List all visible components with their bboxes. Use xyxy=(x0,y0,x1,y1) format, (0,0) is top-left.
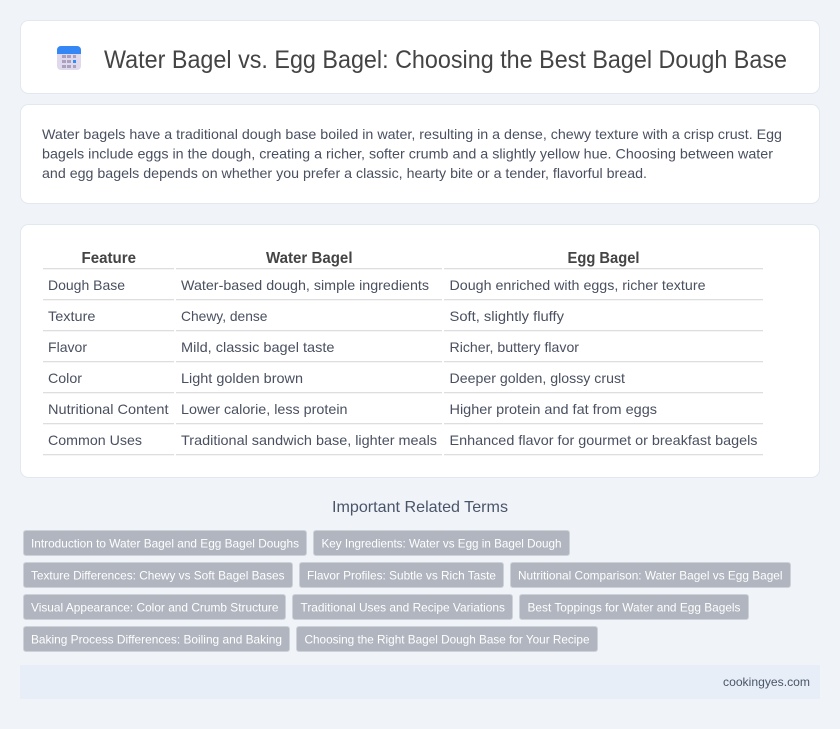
tag: Key Ingredients: Water vs Egg in Bagel Dough xyxy=(322,536,562,550)
row: nutritional content: Nutritional Content xyxy=(48,401,169,417)
tag xyxy=(24,594,286,620)
text block: introduction: and egg bagels depends on whether you prefer a classic, hearty bite or a tender, flavorful bread. xyxy=(42,165,647,181)
table header: Water Bagel xyxy=(266,250,352,267)
tag xyxy=(510,562,790,588)
row: nutritional content: Higher protein and fat from eggs xyxy=(450,401,657,417)
row: common uses xyxy=(48,432,758,448)
tag: Choosing the Right Bagel Dough Base for Your Recipe xyxy=(304,632,590,646)
tag: Flavor Profiles: Subtle vs Rich Taste xyxy=(307,568,496,582)
row: texture: Texture xyxy=(48,308,96,324)
row: texture xyxy=(48,308,564,324)
tag xyxy=(24,626,290,652)
tag xyxy=(300,562,504,588)
row: dough base: Dough enriched with eggs, richer texture xyxy=(450,277,706,293)
row: flavor xyxy=(48,339,579,355)
row: texture: Soft, slightly fluffy xyxy=(450,308,564,324)
table header: Feature xyxy=(82,250,136,267)
row: texture: Chewy, dense xyxy=(181,308,268,324)
row: color: Light golden brown xyxy=(181,370,303,386)
tag xyxy=(296,626,598,652)
tag: Best Toppings for Water and Egg Bagels xyxy=(528,600,740,614)
row: common uses: Traditional sandwich base, lighter meals xyxy=(181,432,437,448)
row: flavor: Richer, buttery flavor xyxy=(450,339,579,355)
row: dough base xyxy=(48,277,706,293)
table header: Egg Bagel xyxy=(568,250,640,267)
heading: related terms: Important Related Terms xyxy=(332,499,508,516)
title: Water Bagel vs. Egg Bagel: Choosing the Best Bagel Dough Base xyxy=(104,46,787,74)
tag xyxy=(520,594,748,620)
tag: Nutritional Comparison: Water Bagel vs Egg Bagel xyxy=(518,568,782,582)
tag: Baking Process Differences: Boiling and Baking xyxy=(31,632,282,646)
icon: calendar xyxy=(57,46,81,70)
row: flavor: Flavor xyxy=(48,339,87,355)
row: nutritional content: Lower calorie, less protein xyxy=(181,401,348,417)
tag: Introduction to Water Bagel and Egg Bagel Doughs xyxy=(31,536,299,550)
panel: comparison table xyxy=(20,224,820,478)
row: color xyxy=(48,370,625,386)
tag: Traditional Uses and Recipe Variations xyxy=(300,600,505,614)
footer source: cookingyes.com xyxy=(723,675,810,689)
row: color: Deeper golden, glossy crust xyxy=(450,370,625,386)
text block: introduction xyxy=(42,126,782,181)
tag list xyxy=(24,530,790,652)
tag xyxy=(314,530,570,556)
tag: Texture Differences: Chewy vs Soft Bagel Bases xyxy=(31,568,284,582)
row: dough base: Dough Base xyxy=(48,277,125,293)
table header xyxy=(82,250,640,267)
row: nutritional content xyxy=(48,401,657,417)
row: common uses: Enhanced flavor for gourmet or breakfast bagels xyxy=(450,432,758,448)
tag xyxy=(292,594,512,620)
panel: intro text xyxy=(20,104,820,204)
text block: introduction: bagels include eggs in the dough, creating a richer, softer crumb and a slightly yellow hue. Choosing between water xyxy=(42,146,773,162)
tag xyxy=(24,530,306,556)
footer xyxy=(20,665,820,699)
panel: header xyxy=(20,20,820,94)
row: dough base: Water-based dough, simple ingredients xyxy=(181,277,429,293)
row: common uses: Common Uses xyxy=(48,432,142,448)
tag: Visual Appearance: Color and Crumb Structure xyxy=(31,600,279,614)
tag xyxy=(24,562,292,588)
text block: introduction: Water bagels have a traditional dough base boiled in water, resulting in a dense, chewy texture with a crisp crust. Egg xyxy=(42,126,782,142)
row: flavor: Mild, classic bagel taste xyxy=(181,339,335,355)
row: color: Color xyxy=(48,370,82,386)
